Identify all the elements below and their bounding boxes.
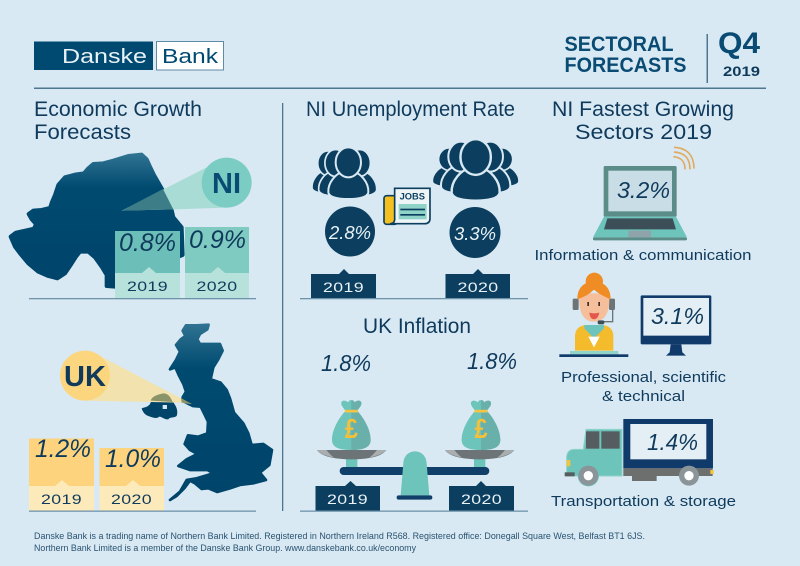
icon: people group 2019: [312, 147, 377, 199]
bar: UK 2020: [100, 445, 164, 511]
stat: laptop 3.2%: 3.2%: [617, 177, 670, 203]
heading: economic growth forecasts: Forecasts: [34, 121, 131, 144]
icon: NI circle: [202, 158, 252, 208]
icon: balance scale with money bags: [317, 400, 514, 500]
label: 2019: 2019: [327, 491, 368, 507]
title: Sectoral Forecasts: SECTORAL: [564, 33, 674, 56]
bar: UK 2020: 2020: [111, 491, 152, 507]
stat: 2020 unemployment: 3.3%: [454, 224, 496, 244]
heading: NI fastest growing sectors: NI Fastest Growing: [552, 98, 734, 121]
stat: 2019 unemployment: [325, 206, 375, 256]
bar: NI 2019: [115, 229, 180, 298]
stat: 2020 unemployment: [450, 207, 500, 258]
heading: UK inflation: UK Inflation: [363, 315, 471, 338]
label: professional, scientific and technical: Professional, scientific: [561, 370, 726, 386]
map: Northern Ireland: [11, 155, 252, 287]
heading: NI unemployment rate: NI Unemployment Rate: [306, 98, 515, 121]
heading: NI fastest growing sectors: Sectors 2019: [575, 121, 712, 144]
panel: NI unemployment rate: [300, 98, 528, 299]
icon: call centre worker: [559, 273, 628, 357]
bar: NI 2020: 2020: [196, 278, 238, 294]
stat: 2020 inflation: 1.8%: [467, 348, 517, 374]
beam: UK callout: [85, 351, 192, 404]
title: Sectoral Forecasts: [564, 33, 686, 77]
icon: UK circle: [60, 351, 110, 401]
logo: Danske Bank: Danske: [62, 46, 147, 68]
issue: Q4 2019: [718, 27, 760, 79]
bar: UK 2019: 2019: [41, 491, 82, 507]
icon: jobs newspaper: JOBS: [400, 192, 425, 202]
panel: economic growth forecasts: NI: [212, 168, 241, 200]
issue: Q4 2019: Q4: [718, 27, 760, 60]
label: 2019: 2019: [323, 279, 364, 295]
bar: NI 2019: 2019: [127, 278, 168, 294]
beam: NI callout: [122, 164, 227, 211]
panel: NI fastest growing sectors: [534, 98, 752, 510]
icon: jobs newspaper: [384, 188, 430, 224]
panel: economic growth forecasts: [11, 98, 272, 512]
label: 2020: 2020: [458, 279, 498, 295]
label: professional, scientific and technical: & technical: [602, 389, 685, 405]
bar: UK 2019: [29, 435, 94, 511]
logo: Danske Bank: Bank: [162, 46, 219, 68]
label: 2020: [446, 269, 510, 299]
bar: NI 2019: 0.8%: [119, 229, 176, 257]
stat: monitor 3.1%: 3.1%: [651, 303, 704, 329]
panel: UK inflation: [300, 315, 528, 512]
footer text: Northern Bank Limited is a member of the Danske Bank Group. www.danskebank.co.uk/economy: [34, 543, 416, 554]
label: 2020: 2020: [461, 491, 502, 507]
footer text: Danske Bank is a trading name of Northern Bank Limited. Registered in Northern Ireland R568. Registered office: Donegall Square West, Belfast BT1 6JS.: [34, 531, 645, 542]
stat: 2019 unemployment: 2.8%: [328, 223, 371, 243]
icon: laptop: [593, 147, 694, 240]
bar: NI 2020: 0.9%: [189, 226, 246, 254]
issue: Q4 2019: 2019: [723, 63, 760, 79]
label: 2019: [316, 481, 380, 511]
icon: desktop monitor: [641, 295, 711, 356]
logo: Danske Bank: [34, 42, 224, 70]
bar: UK 2019: 1.2%: [35, 435, 91, 463]
bar: NI 2020: [185, 226, 249, 298]
stat: 2019 inflation: 1.8%: [321, 350, 371, 376]
label: 2019: [311, 269, 376, 299]
label: transportation and storage: Transportation & storage: [551, 494, 736, 510]
label: information and communication: Information & communication: [534, 248, 752, 264]
title: Sectoral Forecasts: FORECASTS: [564, 54, 686, 77]
icon: delivery truck: [565, 419, 714, 486]
heading: economic growth forecasts: [34, 98, 202, 144]
label: professional, scientific and technical: [561, 370, 726, 405]
panel: economic growth forecasts: UK: [64, 361, 106, 393]
icon: people group 2020: [432, 139, 519, 201]
heading: NI fastest growing sectors: [552, 98, 734, 144]
label: 2020: [449, 481, 514, 511]
heading: economic growth forecasts: Economic Growth: [34, 98, 202, 121]
map: United Kingdom: [60, 325, 272, 500]
footer text: [34, 531, 645, 554]
stat: truck 1.4%: 1.4%: [647, 429, 698, 455]
bar: UK 2020: 1.0%: [105, 445, 161, 473]
